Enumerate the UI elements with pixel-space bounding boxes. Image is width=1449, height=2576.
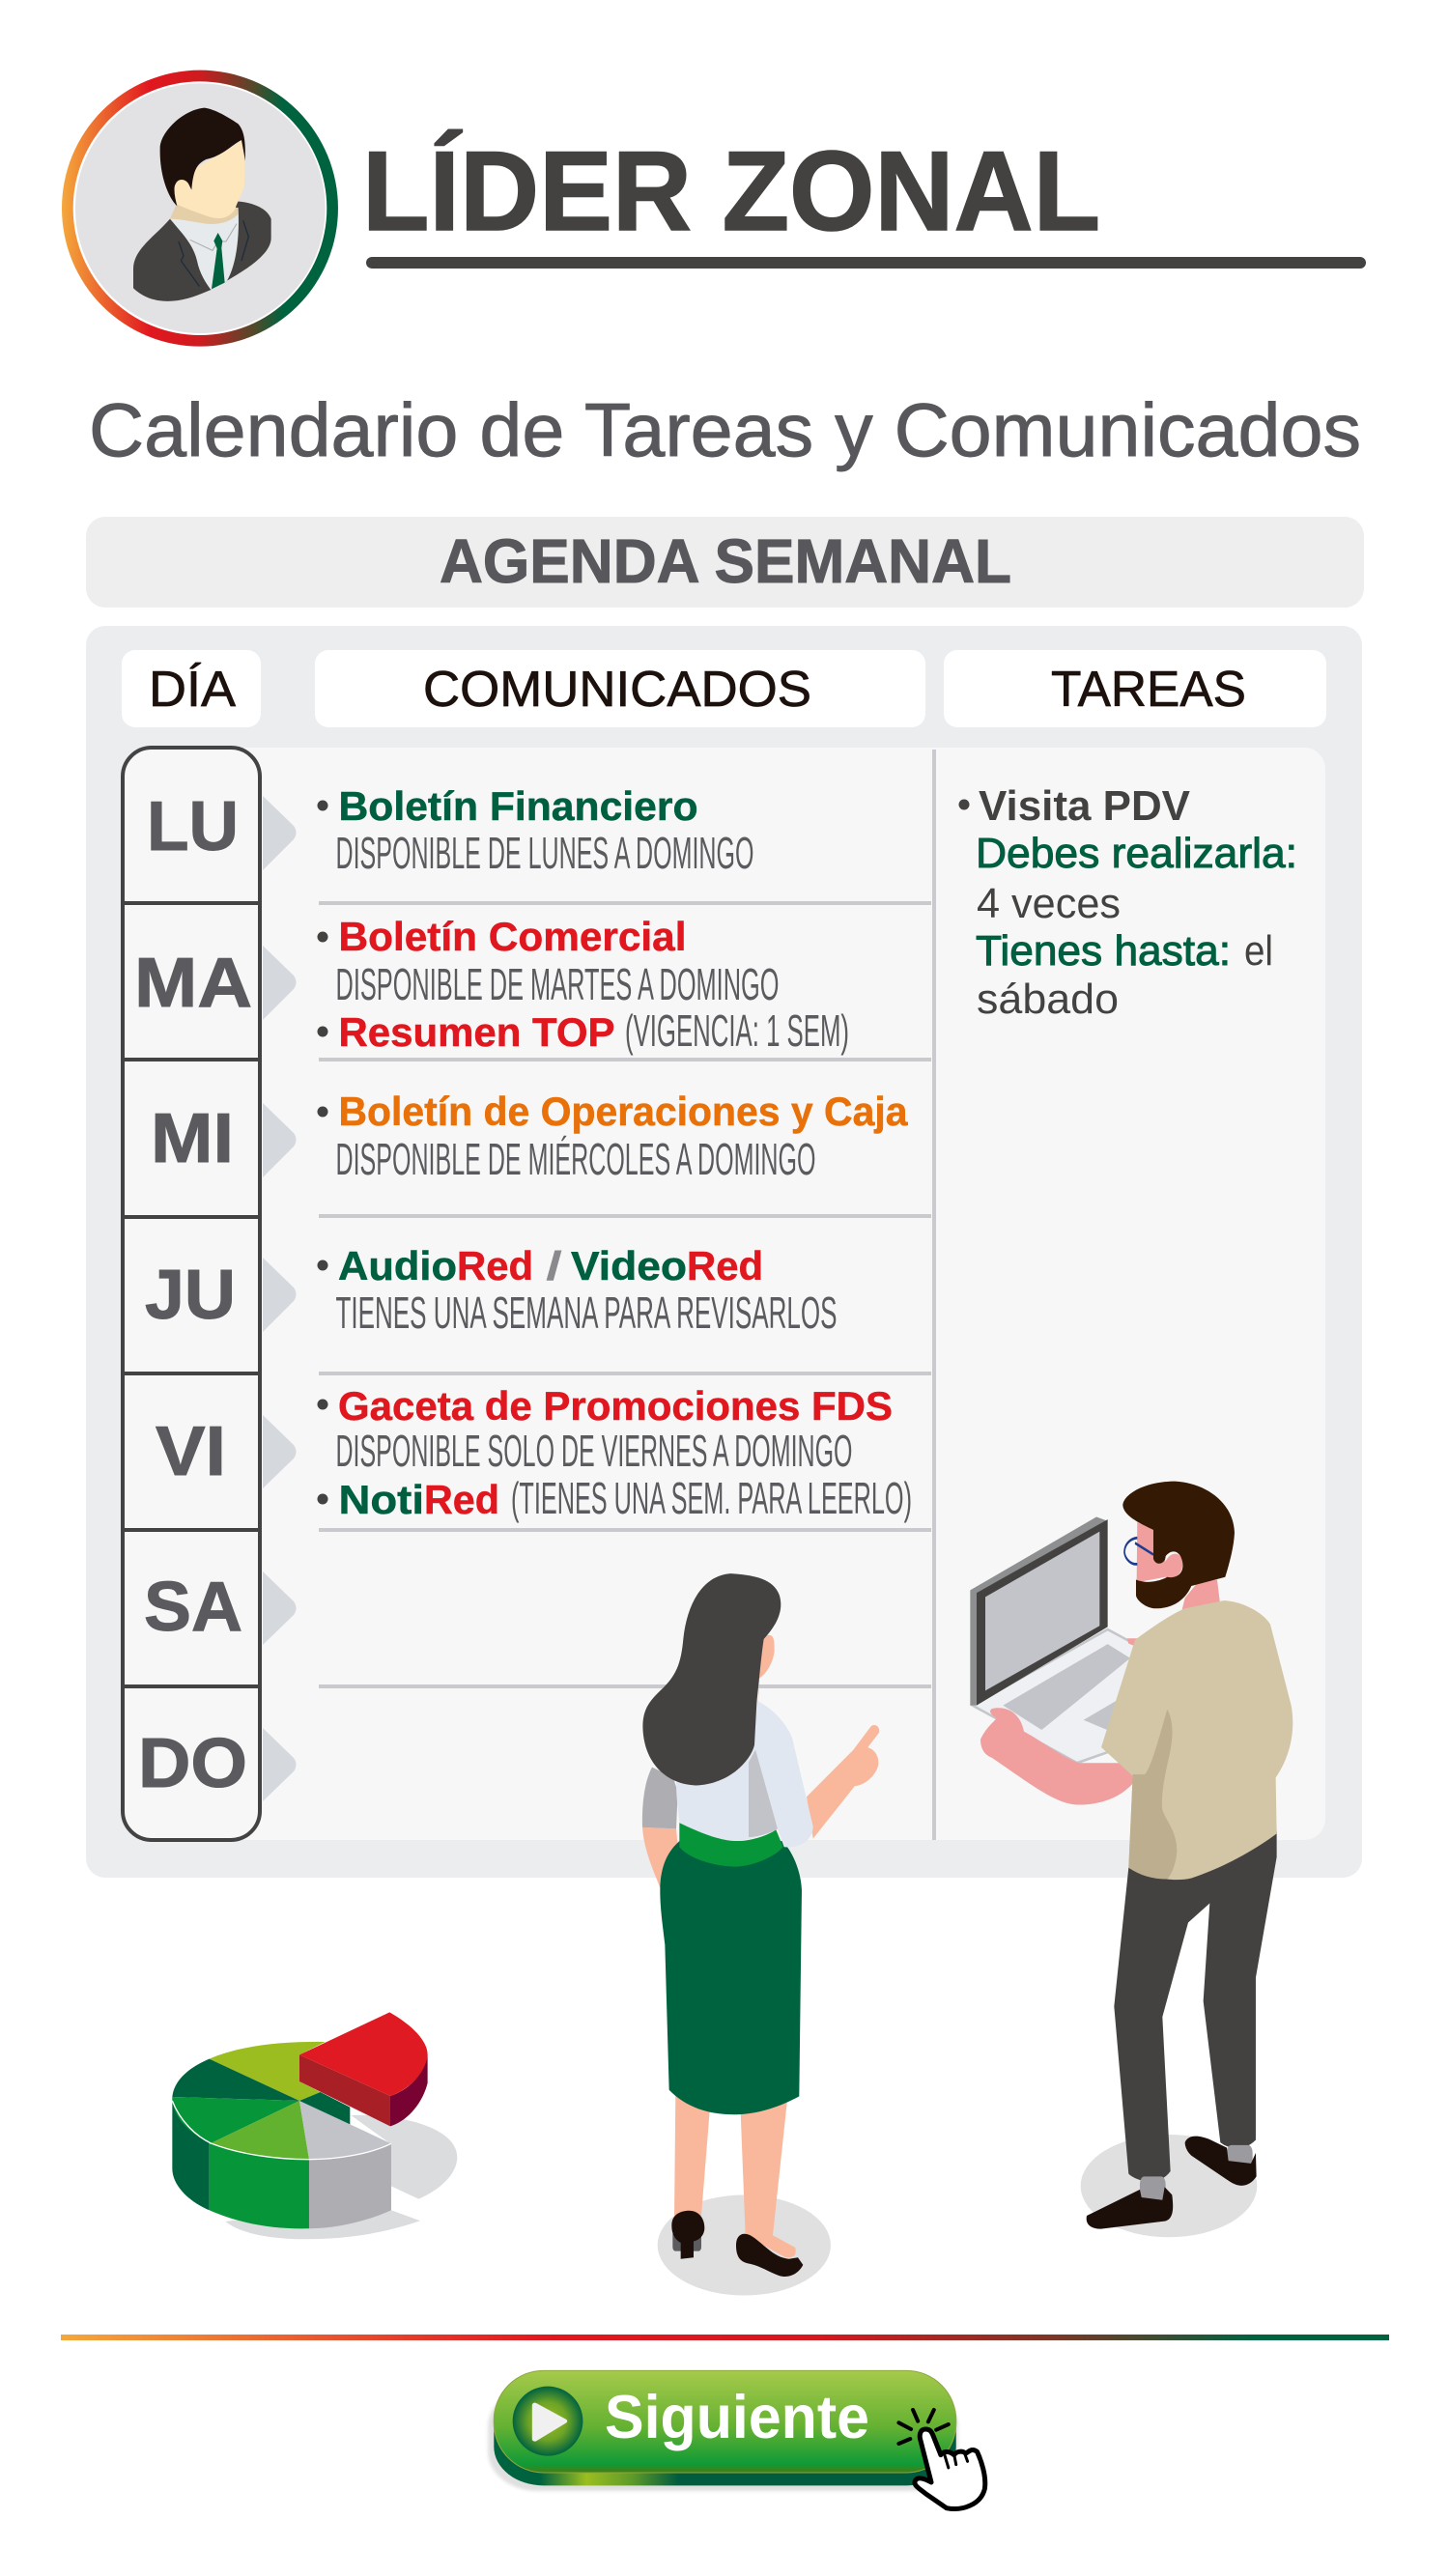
title: LÍDER ZONAL: LÍDER ZONAL [362,127,1100,254]
avatar: business man in gradient ring [62,71,338,347]
icon: clicking hand [898,2410,985,2508]
communiqués: Tuesday: (VIGENCIA: 1 SEM) [625,1005,849,1056]
communiqués: Thursday: Red [687,1243,763,1288]
button: Siguiente: Siguiente [605,2384,869,2451]
communiqués: Friday: (TIENES UNA SEM. PARA LEERLO) [511,1473,912,1523]
header: COMUNICADOS [315,650,925,727]
day column [123,748,296,1840]
tasks: Visita PDV: el [1244,927,1273,975]
tasks: Visita PDV: Debes realizarla: [976,830,1297,877]
day column: VI [156,1413,226,1490]
communiqués: Wednesday [317,1089,908,1184]
gradient divider [61,2335,1389,2340]
communiqués: Thursday: Audio [338,1243,457,1288]
button: Siguiente [488,2370,985,2508]
heading bar: AGENDA SEMANAL: AGENDA SEMANAL [440,526,1011,596]
day column: MA [134,945,252,1022]
communiqués: Friday [317,1383,912,1523]
tasks: Visita PDV: Tienes hasta: [976,927,1231,975]
communiqués: Thursday: Video [571,1243,687,1288]
header: DÍA [122,650,261,727]
heading bar: AGENDA SEMANAL [86,517,1364,608]
communiqués: Friday: Red [424,1477,499,1522]
arrows beside day cells [263,796,296,1801]
communiqués: Thursday: / [546,1243,562,1288]
communiqués: Thursday: Red [457,1243,533,1288]
tasks: Visita PDV [958,782,1297,1023]
communiqués: Monday: DISPONIBLE DE LUNES A DOMINGO [336,828,753,878]
communiqués: Tuesday [317,914,849,1056]
communiqués: Tuesday: Resumen TOP [338,1009,614,1055]
day column: MI [151,1100,234,1177]
illustration: woman pointing [642,1573,879,2296]
communiqués: Monday: Boletín Financiero [338,783,697,829]
communiqués: Wednesday: DISPONIBLE DE MIÉRCOLES A DOMINGO [336,1134,815,1184]
illustration: 3D pie chart [172,2012,457,2239]
communiqués: Tuesday: Boletín Comercial [338,914,686,959]
tasks: Visita PDV: Visita PDV [979,782,1191,830]
day column: DO [138,1725,247,1802]
day column: LU [147,788,239,865]
communiqués: Wednesday: Boletín de Operaciones y Caja [338,1089,908,1134]
communiqués: Friday: DISPONIBLE SOLO DE VIERNES A DOMINGO [336,1426,852,1476]
tasks: Visita PDV: 4 veces [977,880,1121,927]
communiqués: Friday: Noti [338,1477,424,1522]
header: TAREAS: TAREAS [1051,662,1246,718]
communiqués: Monday [317,783,753,878]
communiqués: Thursday [317,1243,837,1338]
communiqués: Thursday: TIENES UNA SEMANA PARA REVISARLOS [336,1288,837,1338]
tasks: Visita PDV: sábado [977,976,1119,1023]
header: TAREAS [944,650,1326,727]
header: DÍA: DÍA [149,662,236,718]
title: LÍDER ZONAL [362,127,1366,269]
communiqués: Friday: Gaceta de Promociones FDS [338,1383,893,1429]
subtitle: Calendario de Tareas y Comunicados [89,387,1361,472]
communiqués: Tuesday: DISPONIBLE DE MARTES A DOMINGO [336,959,779,1009]
day column: SA [144,1569,242,1646]
illustration: man with laptop [970,1482,1293,2237]
day column: JU [145,1257,236,1334]
panel: weekly agenda table [86,626,1362,1878]
header: COMUNICADOS: COMUNICADOS [423,662,811,718]
